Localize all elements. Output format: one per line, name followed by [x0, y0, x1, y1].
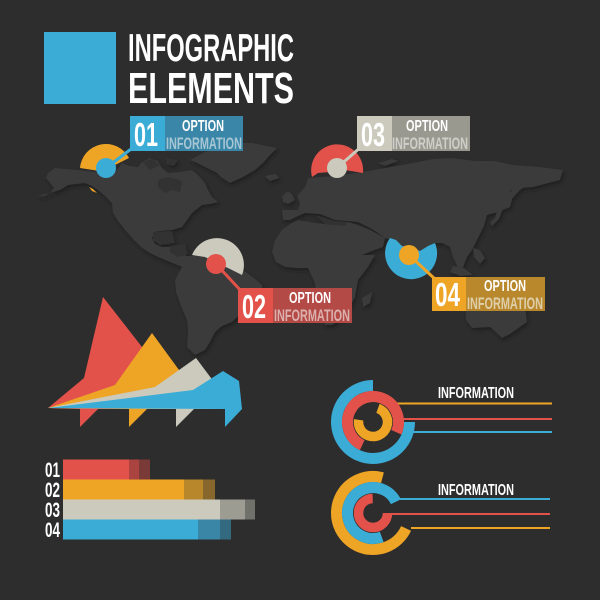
blue peak	[48, 371, 242, 427]
bar 03	[45, 499, 255, 522]
bar 01	[45, 459, 150, 482]
bar 04	[45, 519, 231, 542]
pyramid area chart	[48, 297, 242, 427]
label box: INFORMATION	[392, 134, 468, 153]
blue ring	[336, 386, 410, 458]
blue ring	[340, 480, 406, 546]
sector: orange	[80, 144, 129, 193]
connector line	[409, 255, 436, 280]
title	[128, 27, 294, 113]
marker dot	[206, 254, 226, 274]
callout 01	[80, 116, 243, 193]
callout 04	[385, 238, 545, 313]
marker dot	[399, 245, 419, 265]
orange ring	[324, 464, 422, 562]
red ring	[358, 498, 388, 528]
label box	[357, 116, 470, 153]
callout 02	[192, 238, 352, 325]
label box: INFORMATION	[274, 306, 350, 325]
grey peak	[48, 358, 225, 427]
label box: OPTION	[406, 118, 448, 135]
red peak	[48, 297, 179, 427]
bar 03: 03	[45, 499, 60, 522]
title: ELEMENTS	[128, 64, 294, 113]
label box: OPTION	[484, 278, 526, 295]
bar 02	[45, 479, 215, 502]
label box: 04	[435, 276, 460, 313]
label box: OPTION	[182, 118, 224, 135]
label box	[130, 116, 243, 153]
leader lines	[392, 499, 550, 528]
donut chart: bottom	[324, 464, 550, 562]
red ring	[339, 388, 407, 456]
orange peak	[48, 333, 211, 427]
stacked bars	[45, 459, 255, 542]
label box	[432, 276, 545, 313]
label box	[238, 288, 352, 325]
label box: 02	[242, 288, 266, 325]
sector: blue	[385, 238, 437, 279]
label box: OPTION	[289, 290, 331, 307]
leader lines	[397, 404, 552, 432]
heading: INFORMATION	[438, 482, 514, 499]
bar 01: 01	[45, 459, 60, 482]
donut chart: top	[336, 385, 552, 458]
label box: 03	[361, 116, 385, 153]
title: INFOGRAPHIC	[128, 27, 294, 70]
sector: red	[311, 144, 363, 177]
bar 02: 02	[45, 479, 60, 502]
title icon square	[44, 32, 116, 104]
marker dot	[327, 158, 347, 178]
orange ring	[354, 403, 392, 441]
world map	[37, 143, 563, 355]
label box: 01	[134, 116, 158, 153]
connector line	[216, 264, 242, 292]
connector line	[106, 146, 135, 168]
label box: INFORMATION	[166, 134, 242, 153]
sector: grey	[192, 238, 244, 275]
connector line	[337, 146, 362, 168]
callout 03	[311, 116, 470, 178]
marker dot	[96, 158, 116, 178]
heading: INFORMATION	[438, 385, 514, 402]
bar 04: 04	[45, 519, 60, 542]
label box: INFORMATION	[467, 294, 543, 313]
